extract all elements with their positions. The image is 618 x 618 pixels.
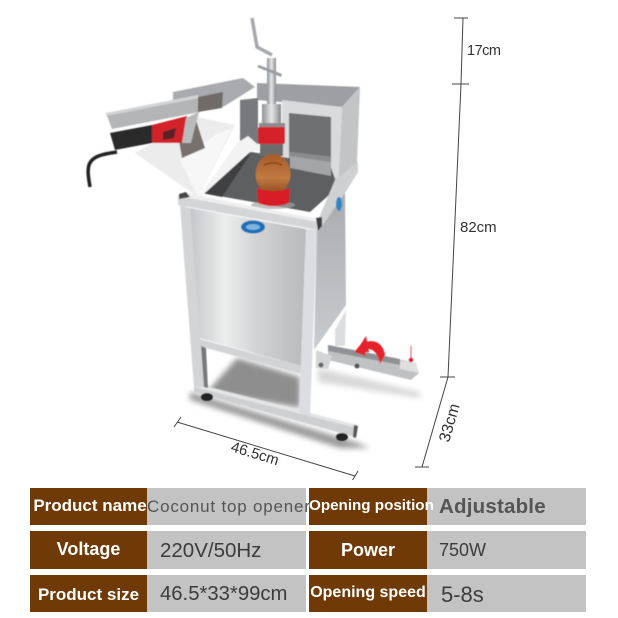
label cell: opening speed: Opening speed [310, 584, 426, 601]
floor shadow [190, 358, 420, 448]
grey cell: 46.5*33*99cm [147, 575, 306, 612]
side panel [314, 162, 358, 350]
front panel [190, 208, 306, 366]
grey cell: coconut top opener: Coconut top opener [147, 497, 311, 516]
right front leg [299, 229, 317, 417]
grey cell: 750W [427, 531, 586, 569]
grey cell: 220V/50Hz: 220V/50Hz [160, 539, 261, 562]
label cell: product name: Product name [33, 496, 147, 515]
product illustration and dimension lines [86, 17, 501, 480]
label cell: power [309, 531, 427, 569]
sink interior [199, 136, 338, 212]
grey cell: coconut top opener [147, 488, 306, 525]
label: 82cm: 82cm [460, 219, 497, 236]
handle and shaft [252, 18, 282, 106]
height dimension line [440, 18, 469, 377]
label: 46.5cm: 46.5cm [229, 439, 281, 469]
red marker pin [409, 346, 413, 362]
bottom frame [194, 383, 358, 441]
top rim [178, 192, 322, 231]
brand badge [241, 220, 265, 234]
angle grinder [88, 112, 199, 187]
coconut [256, 154, 290, 194]
label cell: product size: Product size [38, 585, 139, 604]
label: 17cm: 17cm [467, 43, 501, 59]
upper arm [106, 78, 255, 129]
label cell: voltage: Voltage [57, 539, 120, 559]
label cell: opening speed [309, 575, 427, 612]
middle bar [199, 339, 301, 374]
label cell: voltage [30, 531, 147, 569]
grey cell: 5-8s [427, 575, 586, 612]
depth dimension line [415, 377, 448, 467]
transparent guard [135, 117, 235, 197]
label cell: power: Power [341, 540, 395, 560]
grey cell: adjustable: Adjustable [439, 495, 546, 518]
back upper box [240, 83, 360, 187]
machine [88, 18, 419, 441]
spec table [30, 488, 586, 612]
red rotation arrow [355, 336, 385, 364]
label: 33cm: 33cm [437, 402, 464, 444]
label cell: product size [30, 575, 147, 612]
left leg [180, 205, 208, 388]
grey cell: 220V/50Hz [147, 531, 306, 569]
label cell: opening position: Opening position [309, 497, 434, 514]
chuck [259, 104, 285, 128]
red cutter [258, 127, 285, 156]
foot pedal [316, 345, 419, 380]
grey cell: adjustable [427, 488, 586, 525]
label cell: product name [30, 488, 147, 525]
back leg [335, 310, 346, 346]
width dimension line [174, 417, 358, 481]
grey cell: 46.5*33*99cm: 46.5*33*99cm [160, 583, 287, 605]
grey cell: 750W: 750W [439, 540, 486, 560]
grey cell: 5-8s: 5-8s [441, 582, 484, 607]
red cup [251, 188, 295, 209]
label cell: opening position [309, 488, 427, 525]
